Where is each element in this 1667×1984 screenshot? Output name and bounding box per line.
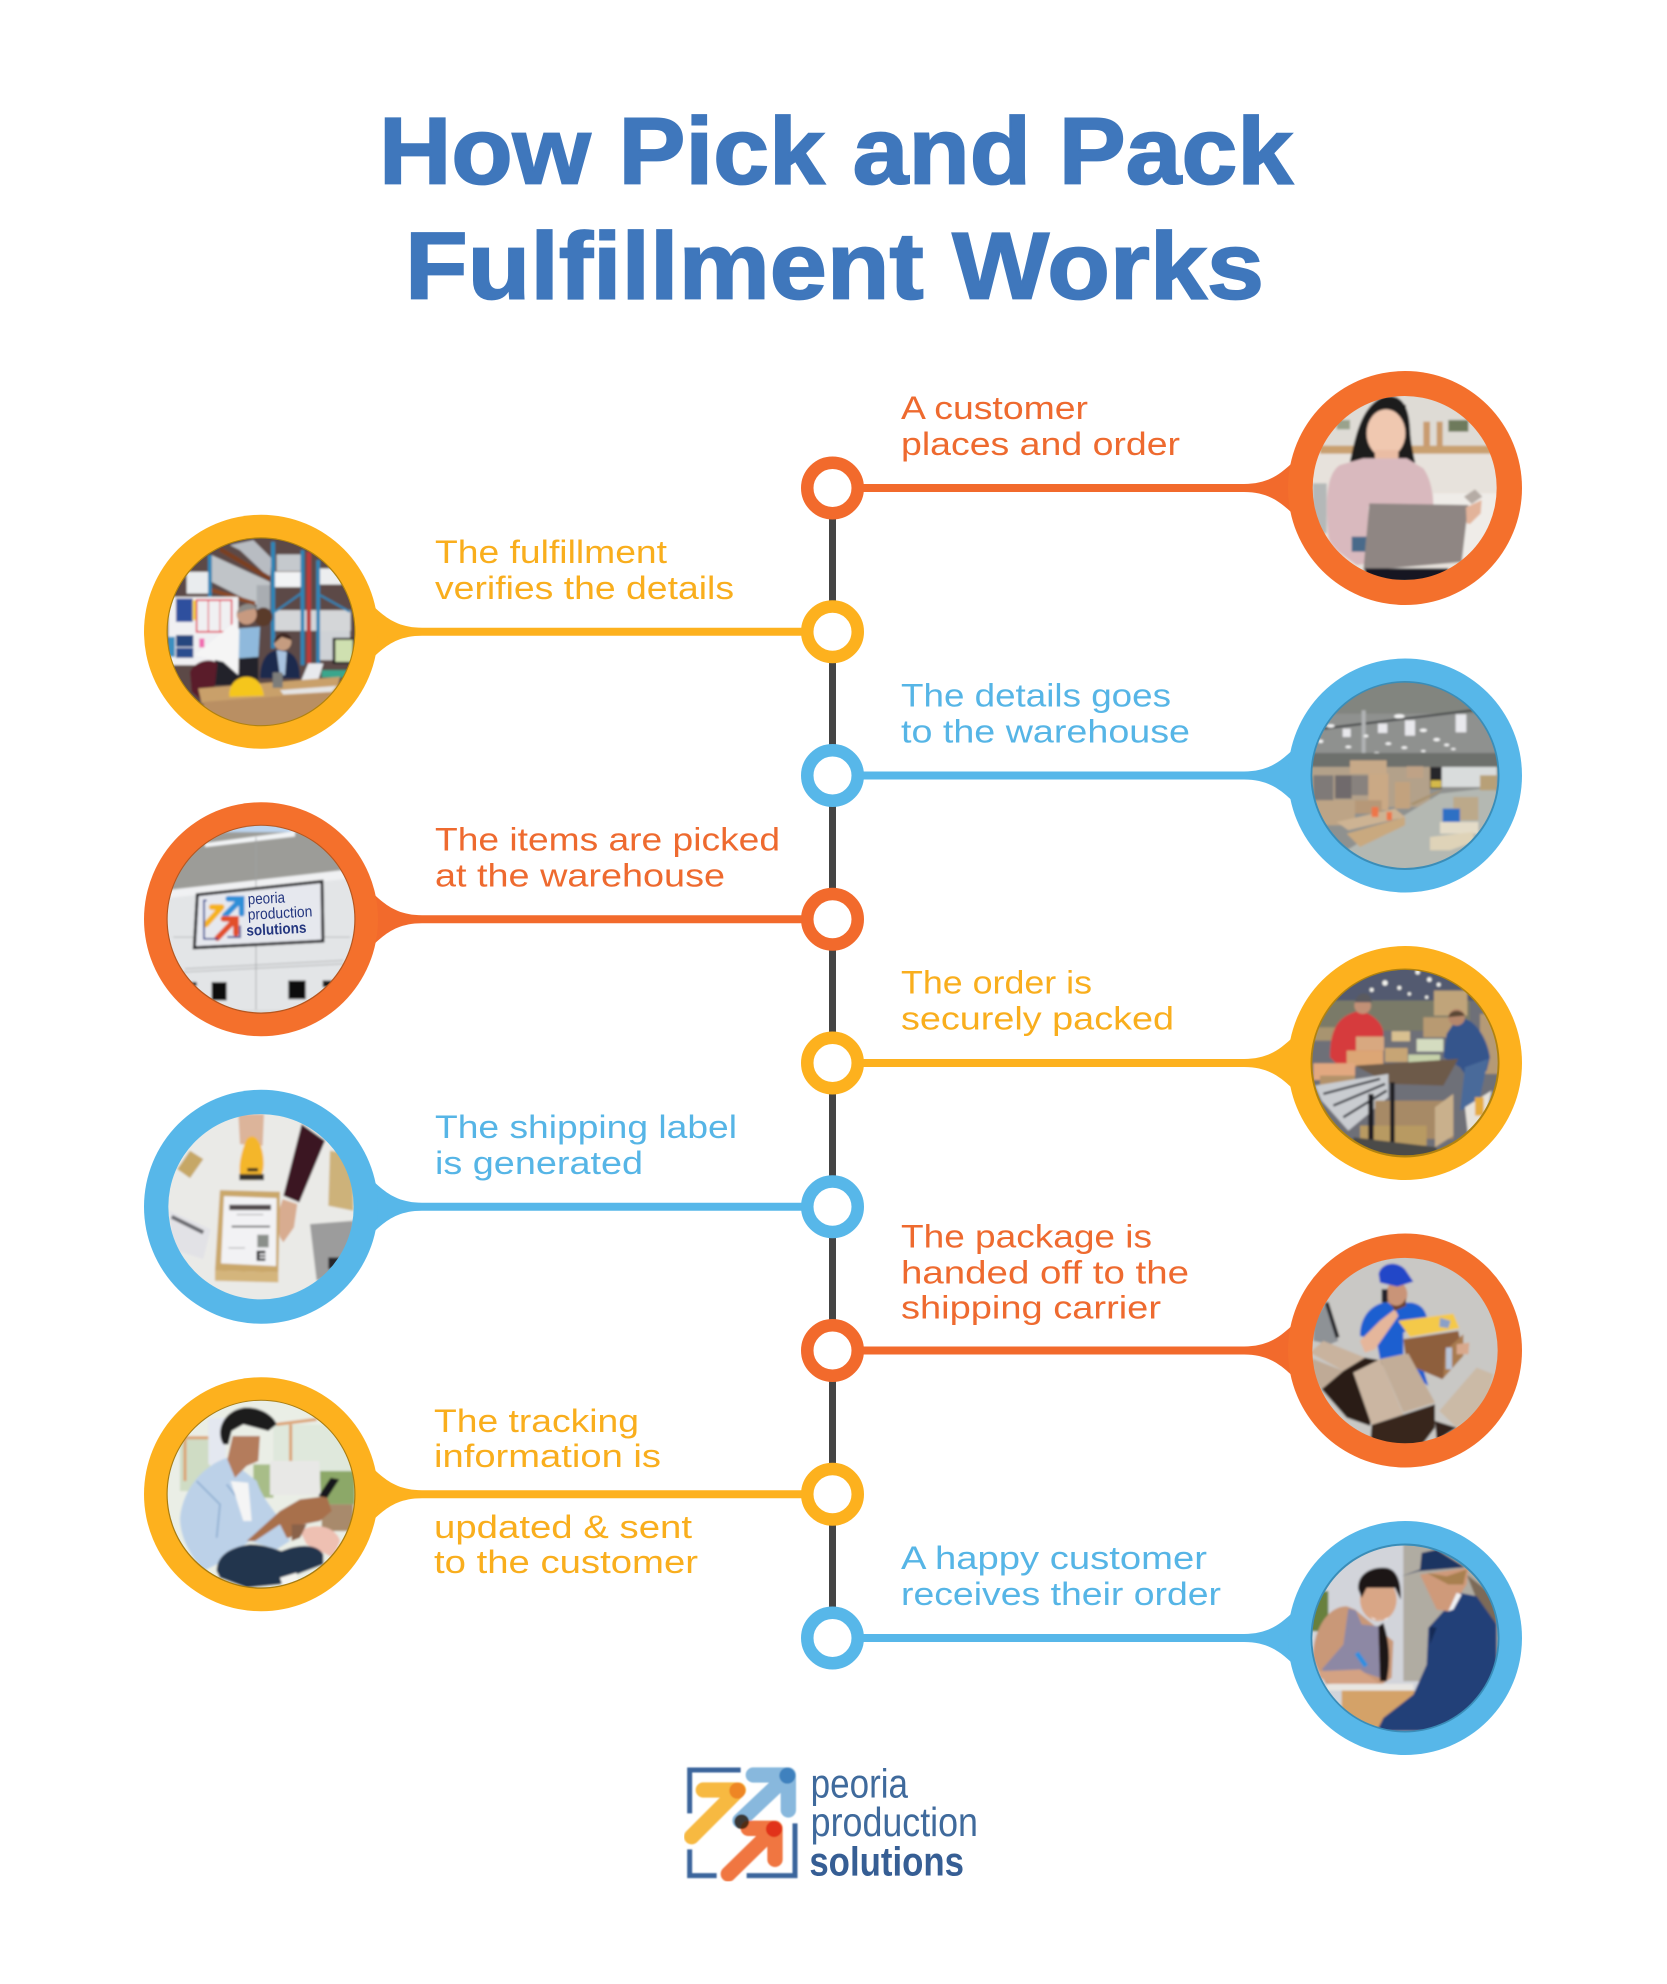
label 8: The tracking — [434, 1403, 639, 1439]
badge 5 — [1288, 946, 1522, 1180]
step 3: details go to warehouse — [807, 658, 1522, 892]
badge 9 — [1288, 1521, 1522, 1755]
connector 4 — [375, 895, 827, 943]
label 2: The fulfillment — [435, 534, 667, 570]
label 1: A customer — [901, 390, 1088, 426]
title: How Pick and Pack — [379, 98, 1293, 204]
timeline spine — [829, 488, 836, 1638]
connector 7 — [838, 1326, 1291, 1374]
logo wordmark: peoria — [811, 1761, 908, 1807]
node 5 — [807, 1038, 858, 1088]
label 9 — [901, 1540, 1221, 1612]
label 6 — [435, 1109, 737, 1181]
label 5: securely packed — [901, 1001, 1174, 1037]
logo wordmark: solutions — [809, 1839, 964, 1885]
label 4 — [435, 821, 780, 893]
photo: warehouse floor — [1312, 682, 1498, 868]
photo: warehouse sign: production — [247, 903, 313, 924]
logo wordmark: production — [811, 1799, 978, 1845]
step 5: order is packed — [807, 946, 1522, 1180]
label 1 — [901, 390, 1180, 462]
connector 3 — [838, 752, 1291, 800]
label 6: is generated — [435, 1145, 643, 1181]
photo ring 9 — [1310, 1544, 1500, 1732]
logo — [690, 1761, 978, 1885]
photo: customer signing delivery — [1312, 1546, 1498, 1731]
label 2 — [435, 534, 734, 606]
step 2: fulfillment verifies — [144, 515, 858, 749]
badge 2 — [144, 515, 378, 749]
logo mark — [690, 1768, 795, 1876]
label 7 — [901, 1218, 1189, 1325]
label 3: The details goes — [901, 677, 1171, 713]
label 2: verifies the details — [435, 570, 734, 606]
label 3 — [901, 677, 1190, 749]
label 1: places and order — [901, 426, 1180, 462]
node 6 — [807, 1182, 858, 1232]
step 7: package handed off — [807, 1218, 1522, 1468]
photo ring 2 — [166, 537, 356, 726]
label 6: The shipping label — [435, 1109, 737, 1145]
step 4: items are picked — [144, 802, 858, 1036]
logo wordmark — [809, 1761, 978, 1885]
badge 3 — [1288, 658, 1522, 892]
photo ring 5 — [1310, 968, 1500, 1158]
badge 4 — [144, 802, 378, 1036]
photo ring 4 — [166, 825, 356, 1014]
node 4 — [807, 894, 858, 944]
photo ring 8 — [166, 1400, 356, 1589]
badge 6 — [144, 1090, 378, 1324]
label 8: updated & sent — [434, 1509, 692, 1545]
photo: warehouse office team — [163, 535, 360, 732]
connector 6 — [375, 1183, 827, 1231]
label 7: shipping carrier — [901, 1289, 1161, 1325]
label 3: to the warehouse — [901, 713, 1190, 749]
step 9: happy customer — [807, 1521, 1522, 1755]
node 8 — [807, 1469, 858, 1520]
label 7: handed off to the — [901, 1254, 1189, 1290]
photo: warehouse sign — [163, 824, 360, 1020]
photo: label scanning — [168, 1114, 354, 1300]
photo: warehouse sign: solutions — [246, 920, 307, 940]
label 4: at the warehouse — [435, 857, 725, 893]
label 5 — [901, 965, 1174, 1037]
node 2 — [807, 606, 858, 657]
photo: courier with boxes — [1312, 1258, 1498, 1444]
badge 8 — [144, 1377, 378, 1611]
node 9 — [807, 1613, 858, 1663]
badge 1 — [1288, 371, 1522, 605]
connector 5 — [838, 1039, 1291, 1087]
label 8: to the customer — [434, 1544, 698, 1580]
title: Fulfillment Works — [405, 214, 1264, 320]
label 4: The items are picked — [435, 821, 780, 857]
connector 8 — [375, 1470, 827, 1518]
label 8: information is — [434, 1438, 661, 1474]
label 7: The package is — [901, 1218, 1152, 1254]
label 5: The order is — [901, 965, 1092, 1001]
step 1: customer places order — [807, 371, 1522, 605]
connector 2 — [375, 608, 827, 656]
label 9: receives their order — [901, 1576, 1221, 1612]
connector 1 — [838, 464, 1291, 512]
photo: man with phone — [163, 1398, 360, 1594]
label 9: A happy customer — [901, 1540, 1207, 1576]
badge 7 — [1288, 1234, 1522, 1468]
node 7 — [807, 1325, 858, 1376]
title — [379, 98, 1293, 320]
photo: woman with laptop — [1312, 396, 1497, 580]
photo: warehouse sign: peoria — [247, 889, 286, 908]
step 8: tracking information — [144, 1377, 858, 1611]
node 1 — [807, 463, 858, 513]
step 6: shipping label — [144, 1090, 858, 1324]
photo: workers packing — [1312, 970, 1498, 1156]
label 8 — [434, 1403, 698, 1580]
connector 9 — [838, 1614, 1291, 1662]
node 3 — [807, 750, 858, 801]
photo ring 3 — [1310, 681, 1500, 870]
